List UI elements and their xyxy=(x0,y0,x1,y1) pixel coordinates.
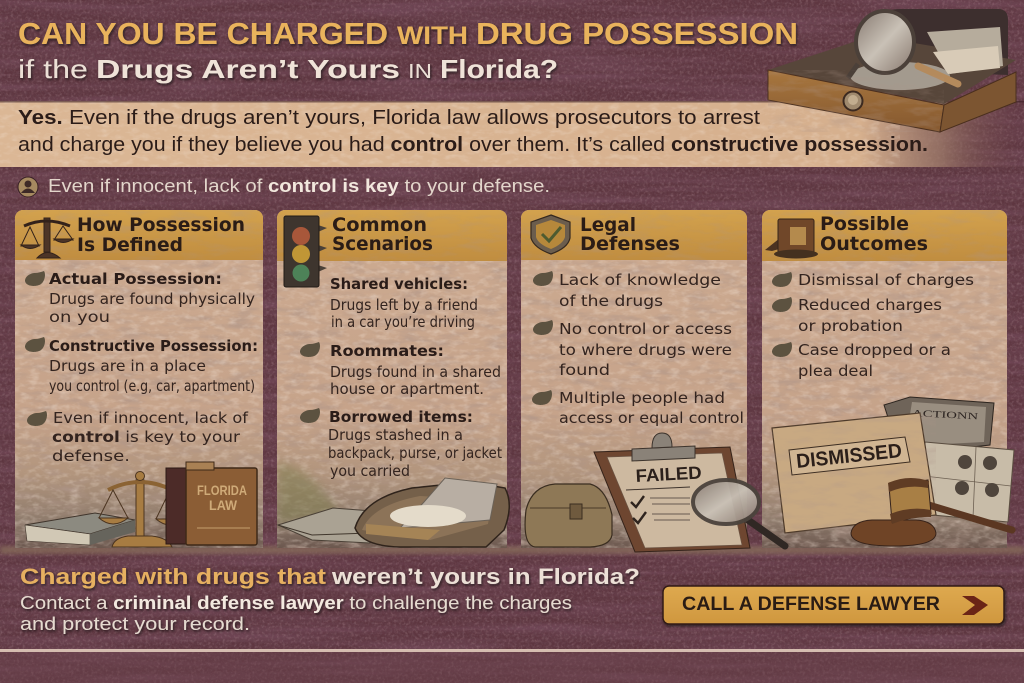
panel: legal defenses xyxy=(521,210,747,548)
illustration: book, scales and Florida law xyxy=(25,462,257,547)
heading xyxy=(820,213,928,255)
item: case dropped xyxy=(772,341,951,380)
item: shared vehicles: in a car you’re driving xyxy=(331,313,475,331)
item: borrowed items: Borrowed items: xyxy=(329,408,473,426)
icon: chevron arrow xyxy=(962,596,988,615)
illustration: dismissed folder, photos and gavel: ACTIONN xyxy=(912,409,978,422)
item: no control or access: found xyxy=(559,361,610,379)
call to action text: Contact a criminal defense lawyer to challenge the charges xyxy=(20,593,572,613)
title xyxy=(18,16,798,51)
subtitle: IN xyxy=(408,61,432,83)
icon: note badge xyxy=(18,177,38,197)
item: multiple people: Multiple people had xyxy=(559,389,725,407)
subtitle: if the xyxy=(18,54,88,84)
panel: common scenarios xyxy=(277,210,509,548)
icon: traffic light xyxy=(284,216,327,287)
item: constructive possession: Constructive Possession: xyxy=(49,337,258,355)
item: no control or access: No control or access xyxy=(559,320,732,338)
item: lack of control: Even if innocent, lack of xyxy=(53,409,249,427)
item: case dropped: plea deal xyxy=(798,362,873,380)
heading xyxy=(77,214,245,256)
ground strip under panels xyxy=(0,546,1024,554)
note: even if innocent: Even if innocent, lack of control is key to your defense. xyxy=(48,176,550,196)
footer rule and stripe xyxy=(0,649,1024,683)
heading: Scenarios xyxy=(332,233,433,255)
illustration: laptop and open bag xyxy=(278,478,509,547)
subtitle: Florida? xyxy=(440,54,558,84)
item: lack of control: defense. xyxy=(52,447,130,465)
title: DRUG POSSESSION xyxy=(476,16,798,51)
item: lack of control xyxy=(27,409,249,465)
icon: shield with check xyxy=(531,215,570,254)
call to action text: Charged with drugs that xyxy=(20,564,327,589)
icon: scales of justice xyxy=(21,218,73,258)
icon: drawer with magnifier and bag xyxy=(768,9,1016,132)
heading: Defenses xyxy=(580,233,680,255)
item: constructive possession: you control (e.g, car, apartment) xyxy=(49,377,255,395)
item: no control or access xyxy=(533,320,732,379)
button: call a defense lawyer: CALL A DEFENSE LAWYER xyxy=(682,594,940,615)
item: constructive possession: Drugs are in a place xyxy=(49,357,206,375)
illustration: dismissed folder, photos and gavel: DISMISSED xyxy=(795,440,903,473)
heading: Legal xyxy=(580,214,636,236)
panel: possible outcomes xyxy=(0,210,1024,683)
answer text: and charge you if they believe you had control over them. It’s called constructive possession. xyxy=(18,134,928,156)
item: case dropped: Case dropped or a xyxy=(798,341,951,359)
item: roommates xyxy=(300,342,501,398)
item: actual possession: on you xyxy=(49,308,110,326)
heading: How Possession xyxy=(77,214,245,236)
illustration: book, scales and Florida law: LAW xyxy=(209,497,238,513)
subtitle: Drugs Aren’t Yours xyxy=(96,54,400,84)
item: borrowed items: Drugs stashed in a xyxy=(328,426,463,444)
item: multiple people: access or equal control xyxy=(559,409,744,427)
item: reduced charges: or probation xyxy=(798,317,903,335)
item: multiple people xyxy=(532,389,744,427)
heading: Common xyxy=(332,214,427,236)
title: WITH xyxy=(397,22,468,50)
item: shared vehicles: Shared vehicles: xyxy=(330,275,468,293)
heading: Possible xyxy=(820,213,909,235)
item: no control or access: to where drugs were xyxy=(559,341,732,359)
item: lack of knowledge xyxy=(533,271,721,310)
answer text: Yes. Even if the drugs aren’t yours, Florida law allows prosecutors to arrest xyxy=(18,107,760,129)
item: shared vehicles xyxy=(330,275,478,331)
illustration: bag, failed clipboard and magnifier xyxy=(525,433,785,552)
item: actual possession: Actual Possession: xyxy=(49,270,222,288)
item: borrowed items: backpack, purse, or jacket xyxy=(328,444,502,462)
illustration: bag, failed clipboard and magnifier: FAILED xyxy=(635,463,702,486)
item: reduced charges: Reduced charges xyxy=(798,296,942,314)
title: CAN YOU BE CHARGED xyxy=(18,16,388,51)
item: borrowed items xyxy=(300,408,502,480)
answer band xyxy=(0,101,1024,167)
illustration: dismissed folder, photos and gavel xyxy=(772,397,1014,546)
item: lack of knowledge: Lack of knowledge xyxy=(559,271,721,289)
call to action text xyxy=(20,564,640,634)
heading: Is Defined xyxy=(77,234,183,256)
heading xyxy=(580,214,680,255)
subtitle xyxy=(18,54,558,84)
item: borrowed items: you carried xyxy=(330,462,410,480)
item: actual possession xyxy=(25,270,255,326)
illustration: book, scales and Florida law: FLORIDA xyxy=(197,482,247,498)
item: actual possession: Drugs are found physically xyxy=(49,290,255,308)
call to action text: and protect your record. xyxy=(20,614,250,634)
heading: Outcomes xyxy=(820,233,928,255)
answer text xyxy=(18,107,928,156)
item: shared vehicles: Drugs left by a friend xyxy=(330,296,478,314)
item: dismissal of charges: Dismissal of charges xyxy=(798,271,974,289)
item: lack of control: control is key to your xyxy=(52,428,241,446)
item: roommates: Roommates: xyxy=(330,342,444,360)
item: reduced charges xyxy=(772,296,942,335)
button: call a defense lawyer xyxy=(663,586,1004,624)
item: roommates: Drugs found in a shared xyxy=(330,363,501,381)
heading xyxy=(332,214,433,255)
item: roommates: house or apartment. xyxy=(330,380,484,398)
item: lack of knowledge: of the drugs xyxy=(559,292,663,310)
item: constructive possession xyxy=(25,337,258,395)
icon: gavel xyxy=(765,219,818,258)
panel: how possession is defined xyxy=(15,210,263,548)
call to action text: weren’t yours in Florida? xyxy=(331,564,640,589)
